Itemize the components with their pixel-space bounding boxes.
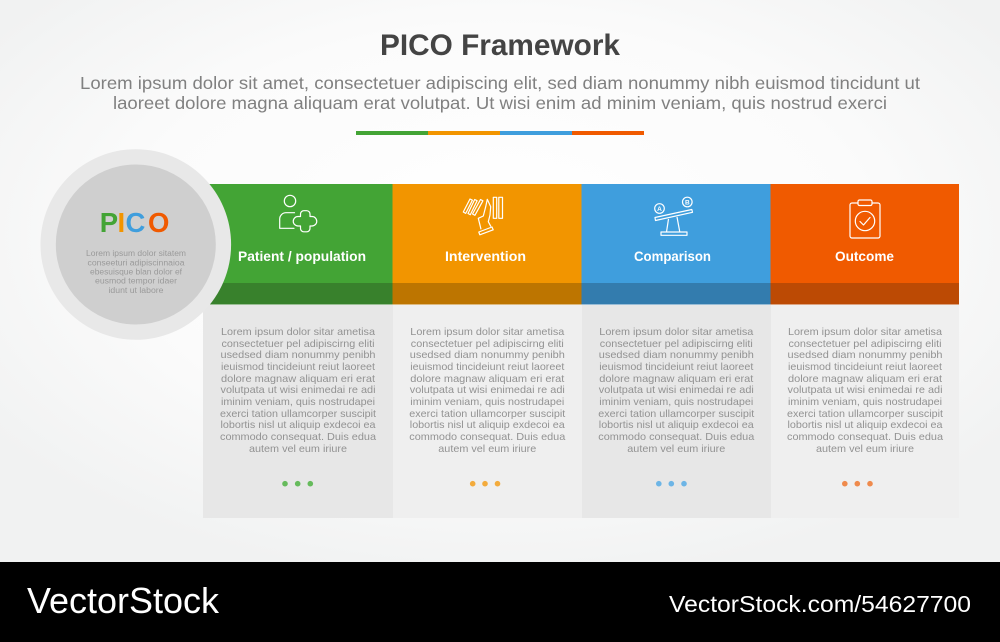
panel: outcome text: ieuismod tincideiunt reiut laoreet xyxy=(788,362,942,373)
panel: outcome text: exerci tation ullamcorper suscipit xyxy=(787,409,943,420)
panel: intervention text: iminim veniam, quis nostrudapei xyxy=(410,397,564,408)
panel: outcome text: commodo consequat. Duis edua xyxy=(787,432,943,443)
panel: patient text: ieuismod tincideiunt reiut laoreet xyxy=(221,362,375,373)
panel: comparison text: commodo consequat. Duis edua xyxy=(598,432,755,443)
panel: patient text: consectetuer pel adipiscirng eliti xyxy=(222,339,374,350)
panel: comparison text: volutpata ut wisi enimedai re adi xyxy=(599,385,754,396)
header: patient / population xyxy=(203,184,392,304)
circle description: eusmod tempor idaer xyxy=(95,277,177,286)
panel: patient text: usedsed diam nonummy penibh xyxy=(220,350,376,361)
header: patient / population: Patient / population xyxy=(238,248,366,264)
circle description: ebesuisque blan dolor ef xyxy=(90,268,183,276)
panel: outcome text: consectetuer pel adipiscirng eliti xyxy=(788,339,942,350)
panel: intervention text: ieuismod tincideiunt reiut laoreet xyxy=(410,362,564,373)
icon: hand with dominoes xyxy=(463,197,502,235)
panel: patient text: volutpata ut wisi enimedai re adi xyxy=(220,385,376,396)
panel: outcome text: volutpata ut wisi enimedai re adi xyxy=(788,385,942,396)
panel: patient text: exerci tation ullamcorper suscipit xyxy=(220,409,376,420)
panel: intervention text: autem vel eum iriure xyxy=(438,444,537,455)
panel: patient text: lobortis nisl ut aliquip exdecoi ea xyxy=(220,420,376,431)
panel: outcome text: autem vel eum iriure xyxy=(816,444,914,455)
PICO wordmark: O xyxy=(148,207,169,238)
panel: patient text: dolore magnaw aliquam eri erat xyxy=(221,374,375,385)
panel: comparison text: ieuismod tincideiunt reiut laoreet xyxy=(599,362,753,373)
panel: intervention text: dolore magnaw aliquam eri erat xyxy=(410,374,564,385)
circle description: idunt ut labore xyxy=(108,286,164,295)
panel: patient text xyxy=(203,305,393,518)
header: intervention xyxy=(392,184,582,304)
circle description: Lorem ipsum dolor sitatem xyxy=(86,249,186,258)
footer bar: VectorStock xyxy=(27,580,220,621)
header: comparison xyxy=(582,184,770,304)
panel: intervention text: consectetuer pel adipiscirng eliti xyxy=(411,339,564,350)
panel: patient text: commodo consequat. Duis edua xyxy=(220,432,376,443)
PICO wordmark: P xyxy=(100,207,118,238)
icon: balance scale A B: A xyxy=(657,206,662,213)
subtitle: laoreet dolore magna aliquam erat volutpat. Ut wisi enim ad minim veniam, quis nostrud exerci xyxy=(113,93,887,113)
panel: intervention text: Lorem ipsum dolor sitar ametisa xyxy=(410,327,565,338)
header: outcome xyxy=(770,184,959,304)
header: outcome: Outcome xyxy=(835,248,894,264)
panel: intervention text: lobortis nisl ut aliquip exdecoi ea xyxy=(410,420,565,431)
icon: patient with cross xyxy=(280,195,317,232)
title: PICO Framework xyxy=(380,29,620,62)
panel: outcome text: Lorem ipsum dolor sitar ametisa xyxy=(788,327,942,338)
panel: outcome text: lobortis nisl ut aliquip exdecoi ea xyxy=(788,420,943,431)
panel: patient text: Lorem ipsum dolor sitar ametisa xyxy=(221,327,375,338)
panel: intervention text: usedsed diam nonummy penibh xyxy=(410,350,565,361)
panel: comparison text: consectetuer pel adipiscirng eliti xyxy=(600,339,753,350)
panel: comparison text: lobortis nisl ut aliquip exdecoi ea xyxy=(599,420,754,431)
icon: balance scale A B: B xyxy=(685,200,690,206)
footer bar xyxy=(0,562,1000,642)
panel: comparison text: iminim veniam, quis nostrudapei xyxy=(599,397,753,408)
PICO wordmark xyxy=(100,207,169,238)
panel: outcome text xyxy=(771,305,959,518)
panel: intervention text xyxy=(393,305,582,518)
circle description xyxy=(86,249,186,295)
panel: outcome text: iminim veniam, quis nostrudapei xyxy=(788,397,942,408)
panel: patient text: iminim veniam, quis nostrudapei xyxy=(221,397,375,408)
panel: outcome text: usedsed diam nonummy penibh xyxy=(788,350,943,361)
icon: clipboard with check xyxy=(850,200,880,238)
panel: comparison text xyxy=(582,305,771,518)
header: intervention: Intervention xyxy=(445,248,526,264)
header: comparison: Comparison xyxy=(634,248,711,264)
PICO wordmark: I xyxy=(118,207,125,238)
panel: comparison text: dolore magnaw aliquam eri erat xyxy=(599,374,753,385)
subtitle: Lorem ipsum dolor sit amet, consectetuer adipiscing elit, sed diam nonummy nibh euismod tincidunt ut xyxy=(80,73,920,93)
panel: patient text: autem vel eum iriure xyxy=(249,444,347,455)
panel: comparison text: autem vel eum iriure xyxy=(627,444,726,455)
footer bar: VectorStock.com/54627700 xyxy=(669,591,971,617)
PICO wordmark: C xyxy=(126,207,146,238)
subtitle xyxy=(80,73,920,113)
panel: comparison text: usedsed diam nonummy penibh xyxy=(599,350,754,361)
circle description: conseeturi adipiscinnaioa xyxy=(88,258,185,267)
panel: comparison text: Lorem ipsum dolor sitar ametisa xyxy=(599,327,754,338)
panel: intervention text: volutpata ut wisi enimedai re adi xyxy=(410,385,565,396)
icon: balance scale A B xyxy=(655,197,692,235)
panel: comparison text: exerci tation ullamcorper suscipit xyxy=(598,409,754,420)
center circle: PICO xyxy=(40,149,231,340)
panel: intervention text: exerci tation ullamcorper suscipit xyxy=(409,409,565,420)
panel: outcome text: dolore magnaw aliquam eri erat xyxy=(788,374,942,385)
panel: intervention text: commodo consequat. Duis edua xyxy=(409,432,566,443)
colored divider xyxy=(356,131,644,135)
